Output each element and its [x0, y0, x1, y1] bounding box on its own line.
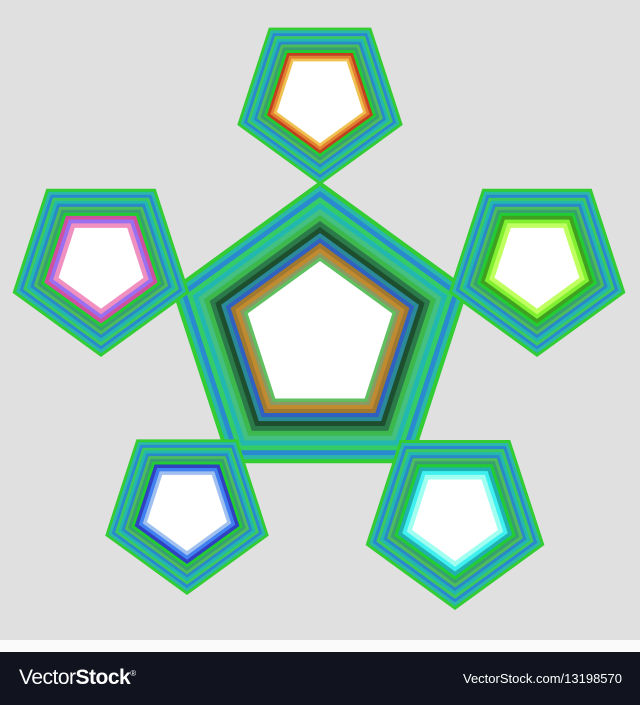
pentagon: top (orange): [237, 28, 403, 185]
pentagon: bottom-left (blue): [105, 439, 269, 595]
footer logo: VectorStock®: [19, 666, 136, 689]
pentagon: left (pink): [13, 189, 189, 357]
central pentagon: [172, 181, 468, 463]
white strip: [0, 640, 640, 652]
pentagon: right (lime): [449, 189, 625, 357]
footer url: VectorStock.com/13198570: [463, 671, 622, 686]
pentagon: bottom-right (cyan): [366, 440, 544, 610]
footer bar: [0, 652, 640, 705]
